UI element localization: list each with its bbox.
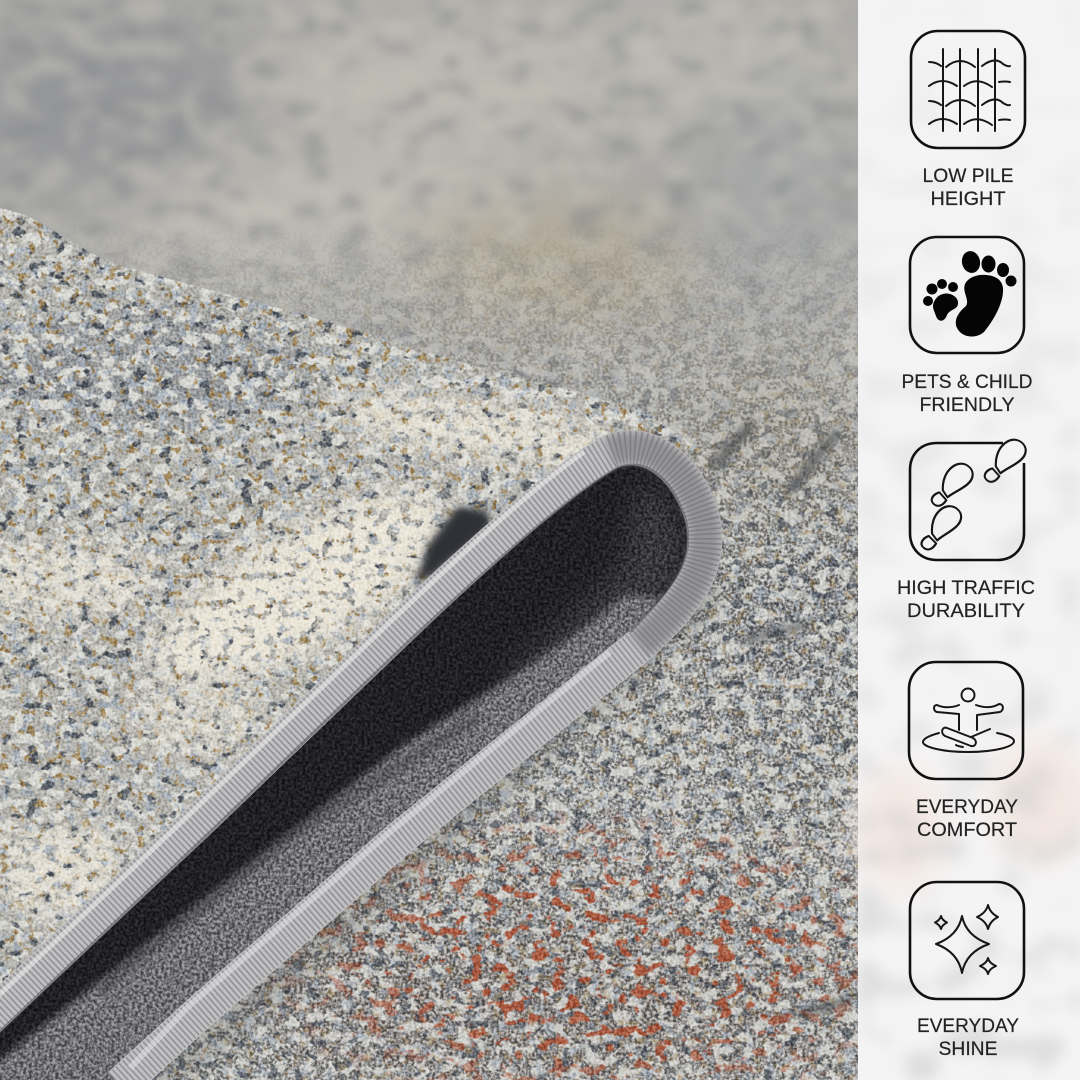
- label: low pile height: LOW PILE: [922, 166, 1014, 187]
- texture: out of focus mottling: [2, 0, 858, 384]
- label: low pile height: HEIGHT: [930, 189, 1006, 210]
- label: everyday shine: SHINE: [938, 1039, 998, 1060]
- label: everyday comfort: COMFORT: [917, 820, 1017, 841]
- photo: rolled rug top face: [0, 208, 700, 984]
- texture: sharp carpet flecks: [83, 238, 858, 1080]
- label: pets and child friendly: PETS & CHILD: [902, 372, 1032, 393]
- icon: high traffic durability: [910, 434, 1030, 560]
- label: pets and child friendly: FRIENDLY: [920, 395, 1015, 416]
- photo: ribbed binding edge: [0, 448, 705, 1080]
- panel: features sidebar: [855, 0, 1080, 1080]
- label: high traffic durability: HIGH TRAFFIC: [897, 578, 1035, 599]
- photo: dark streaks in the rug pattern: [715, 425, 850, 1015]
- photo: shadow under the fold: [150, 590, 715, 1080]
- icon: everyday comfort: [909, 662, 1023, 779]
- photo: rug background: [0, 0, 860, 1080]
- icon: pets and child friendly: [910, 237, 1024, 353]
- icon: everyday shine: [910, 882, 1024, 999]
- photo: dark inside of the fold: [0, 465, 688, 1080]
- icon: low pile height: [911, 31, 1025, 148]
- label: high traffic durability: DURABILITY: [907, 601, 1025, 622]
- photo: woven grey underside: [0, 595, 690, 1080]
- label: everyday comfort: EVERYDAY: [916, 797, 1018, 818]
- label: everyday shine: EVERYDAY: [917, 1016, 1019, 1037]
